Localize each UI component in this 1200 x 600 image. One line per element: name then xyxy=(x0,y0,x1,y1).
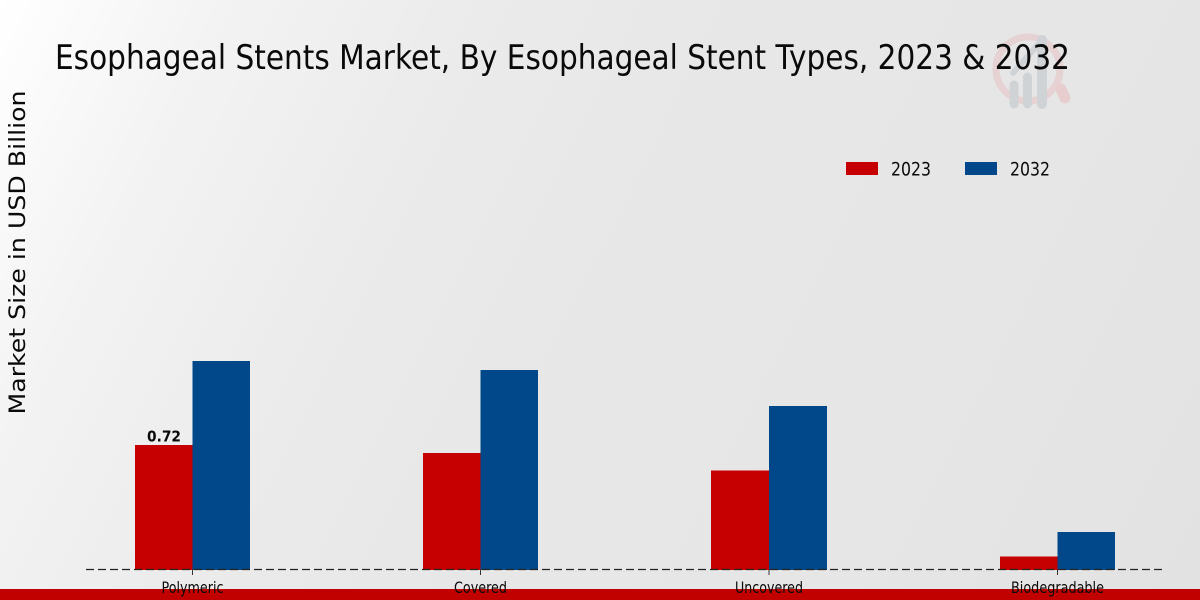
x label: Biodegradable: Biodegradable xyxy=(1011,578,1104,597)
x label: Polymeric: Polymeric xyxy=(162,578,224,597)
legend: 2023 label: 2023 xyxy=(891,158,931,180)
x label: Covered: Covered xyxy=(454,578,507,597)
group: Covered bars xyxy=(423,370,538,570)
y-axis label: Market Size in USD Billion xyxy=(6,90,31,414)
group: Uncovered bars xyxy=(711,406,827,570)
value label 0.72: 0.72 xyxy=(147,428,181,446)
x-axis labels xyxy=(162,578,1104,597)
footer bar xyxy=(0,589,1200,600)
legend: 2032 swatch xyxy=(965,162,997,175)
legend: 2023 swatch xyxy=(846,162,878,175)
legend: 2032 label: 2032 xyxy=(1010,158,1050,180)
legend xyxy=(846,158,1050,180)
title: Esophageal Stents Market, By Esophageal Stent Types, 2023 & 2032 xyxy=(55,38,1070,78)
group: Polymeric bars xyxy=(135,361,250,570)
group: Biodegradable bars xyxy=(1000,532,1115,570)
x-axis baseline xyxy=(86,568,1164,570)
bar chart xyxy=(86,361,1164,575)
icon: watermark logo xyxy=(996,37,1065,104)
x label: Uncovered: Uncovered xyxy=(735,578,803,597)
